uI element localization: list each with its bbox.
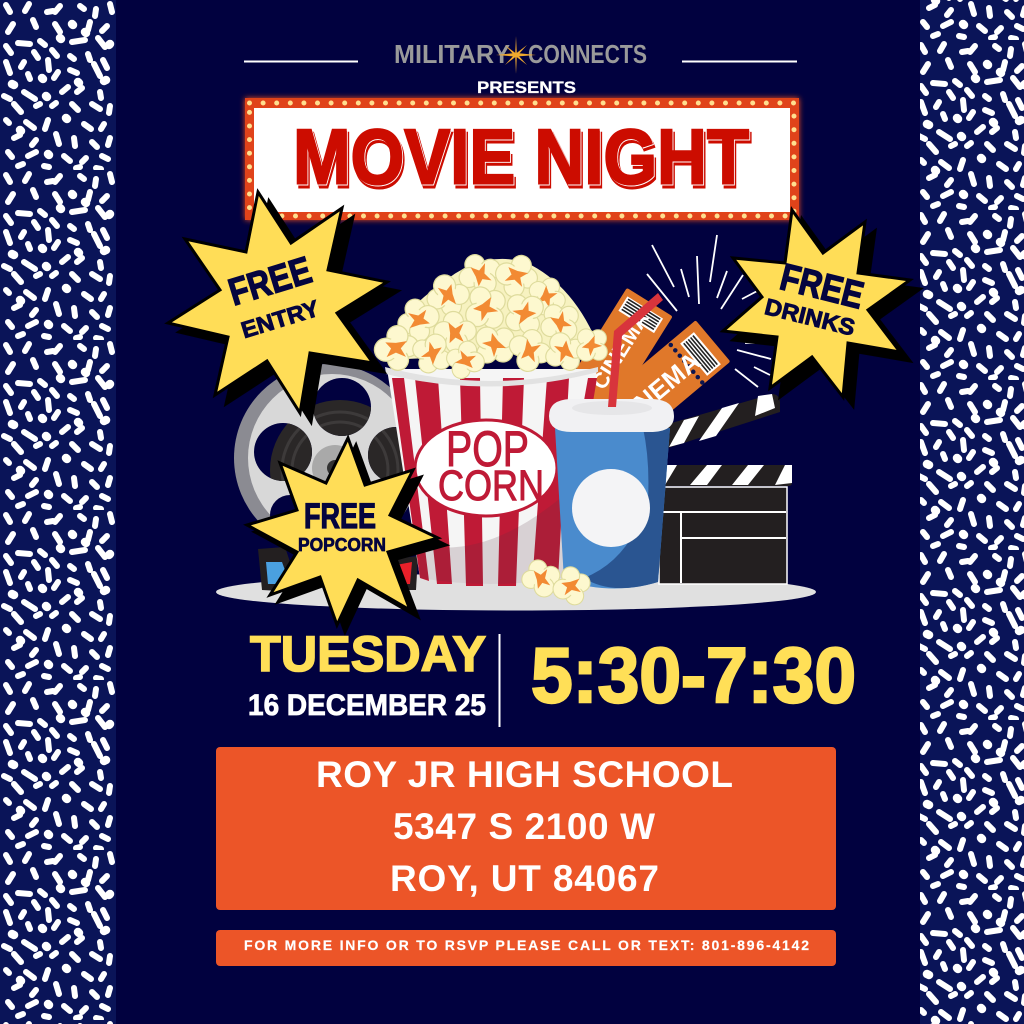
- address panel: 5347 S 2100 W: [393, 806, 655, 847]
- popcorn pile: [370, 251, 607, 383]
- right patterned strip: [920, 0, 1024, 1024]
- logo header: CONNECTS: [528, 39, 647, 69]
- divider: [498, 634, 500, 727]
- ticket back: [561, 288, 673, 422]
- event time: 5:30-7:30: [531, 631, 856, 719]
- popcorn bucket: [385, 367, 598, 586]
- address panel: ROY JR HIGH SCHOOL: [316, 754, 733, 795]
- starburst: free popcorn: [247, 438, 446, 632]
- rsvp bar: [216, 930, 836, 966]
- platform: [216, 574, 816, 610]
- rsvp bar: FOR MORE INFO OR TO RSVP PLEASE CALL OR TEXT: 801-896-4142: [244, 937, 809, 953]
- bucket label: POP: [446, 421, 529, 477]
- left patterned strip: [0, 0, 116, 1024]
- address panel: ROY, UT 84067: [390, 858, 659, 899]
- starburst: free popcorn: FREE: [304, 497, 376, 536]
- presents label: PRESENTS: [477, 78, 576, 97]
- logo header: [244, 36, 797, 74]
- clapperboard: [659, 394, 792, 584]
- small popcorn: [518, 555, 595, 609]
- 3d glasses: [258, 547, 418, 592]
- marquee title: MOVIE NIGHT: [295, 116, 751, 204]
- marquee title: MOVIE NIGHT: [293, 112, 749, 200]
- address panel: [216, 747, 836, 910]
- starburst: free drinks: DRINKS: [762, 293, 858, 341]
- marquee sign: [245, 98, 799, 220]
- drink cup: [549, 293, 674, 589]
- cinema illustration: [216, 235, 816, 610]
- starburst: free popcorn: POPCORN: [298, 535, 386, 555]
- starburst: free entry: [168, 192, 398, 422]
- bucket label: [438, 421, 544, 510]
- event date: 16 DECEMBER 25: [248, 689, 486, 722]
- starburst: free drinks: [723, 210, 920, 406]
- sunburst lines: [647, 235, 771, 387]
- starburst: free drinks: FREE: [776, 256, 868, 318]
- bucket label: CORN: [438, 462, 544, 510]
- starburst: free entry: ENTRY: [238, 295, 322, 343]
- event day: TUESDAY: [250, 626, 486, 682]
- starburst: free entry: FREE: [224, 250, 317, 314]
- marquee title: MOVIE NIGHT: [294, 114, 750, 202]
- ticket back: CINEMA: [587, 307, 654, 394]
- ticket front: [597, 320, 730, 444]
- film reel: [234, 364, 409, 520]
- logo header: MILITARY: [394, 39, 510, 69]
- ticket front: CINEMA: [608, 346, 706, 435]
